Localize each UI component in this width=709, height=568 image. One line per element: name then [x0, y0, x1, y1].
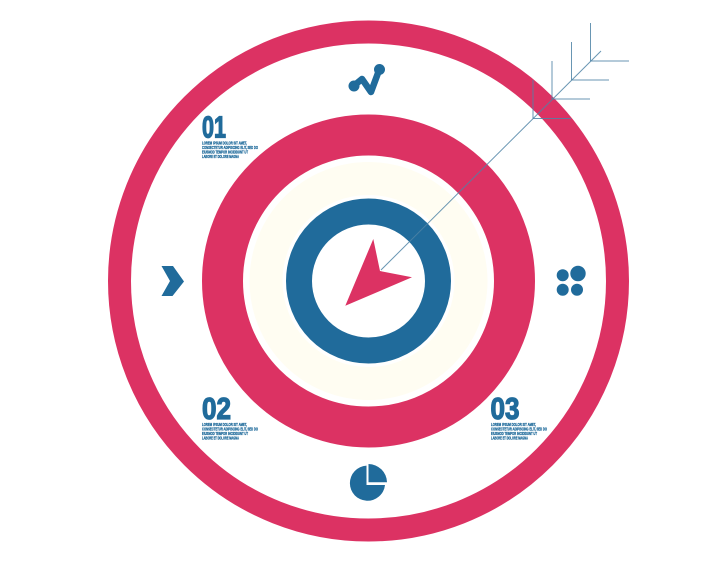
- description 03: LOREM IPSUM DOLOR SIT AMET,: [491, 422, 536, 427]
- target: concentric rings: [120, 32, 618, 530]
- description 03: LABORE ET DOLORE MAGNA: [491, 436, 528, 440]
- text block 02: [202, 391, 258, 440]
- outer red ring: [120, 32, 618, 530]
- description 01: LOREM IPSUM DOLOR SIT AMET,: [202, 140, 247, 146]
- arrowhead: [345, 239, 412, 306]
- text block 01: [202, 110, 258, 159]
- icon: chevron: [162, 266, 184, 296]
- icon: four dots: [557, 266, 586, 296]
- middle red ring: [222, 135, 514, 427]
- text block 03: [490, 391, 547, 440]
- description 03: EIUSMOD TEMPOR INCIDIDUNT UT: [491, 431, 537, 436]
- description 01: LABORE ET DOLORE MAGNA: [202, 154, 239, 159]
- number 03: 03: [490, 391, 520, 426]
- arrow shaft and feathers: [381, 23, 629, 270]
- description 02: [202, 422, 258, 440]
- description 02: LABORE ET DOLORE MAGNA: [202, 436, 239, 440]
- description 03: [491, 422, 547, 440]
- description 03: CONSECTETUR ADIPISCING ELIT, SED DO: [491, 426, 547, 432]
- blue ring: [299, 212, 438, 350]
- icon: line chart: [348, 64, 385, 92]
- number 01: 01: [202, 110, 226, 144]
- description 01: CONSECTETUR ADIPISCING ELIT, SED DO: [202, 145, 258, 150]
- description 02: EIUSMOD TEMPOR INCIDIDUNT UT: [202, 431, 248, 436]
- description 01: EIUSMOD TEMPOR INCIDIDUNT UT: [202, 150, 248, 154]
- description 02: CONSECTETUR ADIPISCING ELIT, SED DO: [202, 426, 258, 432]
- number 02: 02: [202, 391, 231, 426]
- description 01: [202, 140, 258, 159]
- icon: pie chart: [350, 464, 387, 501]
- cream ring: [266, 178, 471, 384]
- description 02: LOREM IPSUM DOLOR SIT AMET,: [202, 422, 247, 427]
